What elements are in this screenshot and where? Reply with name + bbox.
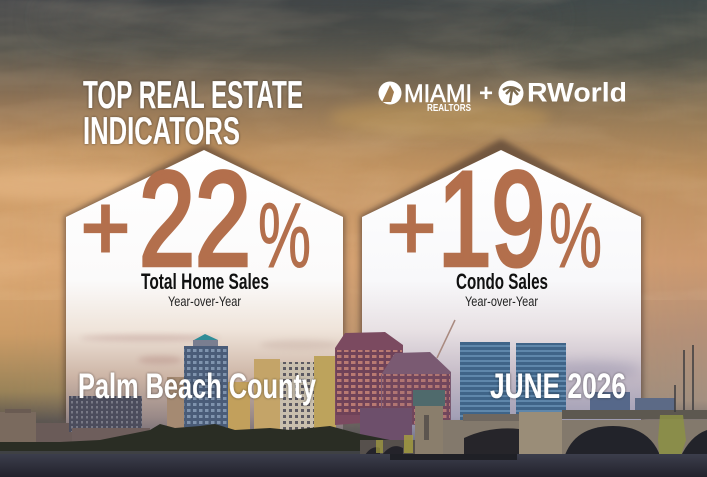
panel: right house shape	[360, 139, 643, 445]
far left apartment block	[0, 409, 72, 450]
value +22%: +	[81, 177, 130, 279]
plus sign between logos: +	[479, 80, 493, 107]
logo: RWorld: RWorld	[527, 78, 627, 108]
tan tower	[167, 377, 185, 433]
title	[83, 74, 303, 153]
value +22%: %	[258, 185, 311, 287]
label: year-over-year: Year-over-Year	[465, 293, 538, 309]
icon: Miami Realtors mark	[378, 82, 402, 104]
value +22%: 22	[139, 145, 251, 294]
pink tower	[335, 332, 403, 425]
teal towers	[460, 342, 675, 424]
panel: left house shape	[64, 144, 345, 445]
value +22%	[81, 145, 311, 294]
grey mid-rise	[69, 396, 142, 432]
label: condo sales: Condo Sales	[456, 269, 548, 294]
label: year-over-year: Year-over-Year	[168, 293, 241, 309]
value +19%: +	[387, 177, 436, 279]
skyline: Palm Beach waterfront buildings	[0, 320, 707, 465]
panel sky streaks	[80, 335, 640, 378]
bridge	[360, 410, 707, 458]
title: INDICATORS	[83, 110, 240, 153]
value +19%: 19	[438, 145, 545, 294]
trees and shoreline	[0, 424, 400, 455]
title: TOP REAL ESTATE	[83, 74, 303, 117]
low-rise row	[72, 428, 150, 450]
crane	[437, 320, 455, 358]
logo: MIAMI Realtors: REALTORS	[427, 103, 471, 114]
value +19%: %	[549, 185, 602, 287]
logo: MIAMI Realtors: MIAMI	[404, 80, 472, 108]
cream towers	[228, 356, 336, 432]
blue tower	[184, 334, 228, 434]
water	[0, 451, 707, 477]
lamp posts	[675, 345, 693, 412]
location label: Palm Beach County	[78, 367, 316, 406]
date label: JUNE 2026	[490, 367, 626, 406]
value +19%	[387, 145, 602, 294]
bridge tower	[413, 390, 445, 455]
icon: palm tree globe	[498, 80, 524, 106]
logo: MIAMI Realtors	[378, 80, 472, 114]
stat: condo sales +19%	[387, 145, 602, 309]
second pink tower	[360, 352, 451, 442]
label: total home sales: Total Home Sales	[141, 269, 269, 294]
stat: total home sales +22%	[81, 145, 311, 309]
bridge lights	[376, 415, 686, 465]
